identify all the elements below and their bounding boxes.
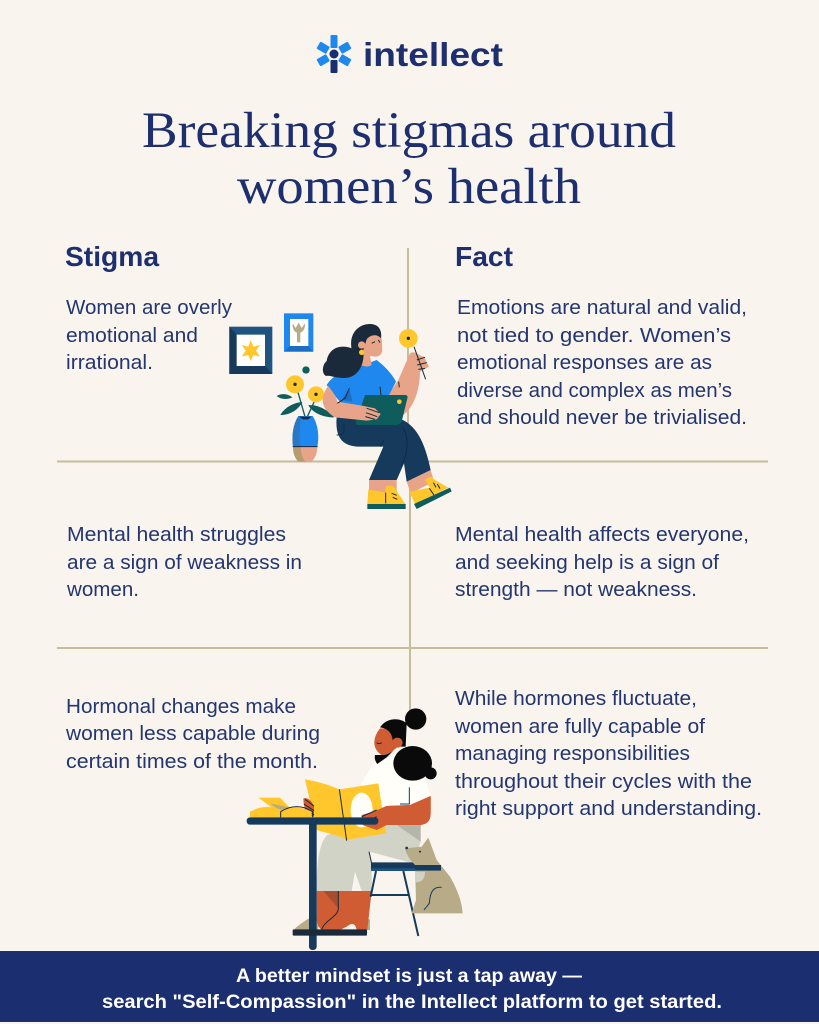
stigma 3 text: Hormonal changes make — [66, 696, 296, 718]
fact 1 text: Emotions are natural and valid, — [457, 297, 747, 319]
title: Breaking stigmas around — [142, 103, 676, 159]
icon: open book and hands — [250, 779, 431, 841]
illustration: woman sitting with tablet and flower — [229, 313, 452, 509]
logo — [316, 35, 503, 73]
stigma 1 text: emotional and — [66, 325, 198, 347]
fact 3 text: women are fully capable of — [454, 716, 705, 738]
figure: woman reading — [295, 708, 437, 930]
fact 1 text: not tied to gender. Women’s — [457, 325, 731, 347]
stigma 3 text: certain times of the month. — [66, 751, 318, 773]
stigma 3 text — [65, 696, 320, 773]
stigma 2 text: women. — [66, 579, 139, 601]
table grid lines — [57, 248, 768, 720]
fact 1 text: and should never be trivialised. — [457, 407, 747, 429]
title — [142, 103, 676, 215]
stigma 2 text: Mental health struggles — [67, 524, 286, 546]
heading: fact: Fact — [455, 241, 513, 272]
desk and chair — [247, 817, 418, 950]
stigma 1 text — [66, 297, 232, 374]
footer banner: search "Self-Compassion" in the Intellect platform to get started. — [102, 991, 722, 1013]
fact 3 text: While hormones fluctuate, — [455, 688, 697, 710]
fact 2 text — [455, 524, 749, 601]
title: women’s health — [237, 159, 581, 215]
logo: intellect — [363, 36, 503, 73]
stigma 3 text: women less capable during — [65, 723, 320, 745]
icon: large framed star — [229, 327, 272, 374]
fact 1 text: diverse and complex as men’s — [457, 380, 732, 402]
heading: stigma: Stigma — [65, 241, 159, 272]
stigma 2 text: are a sign of weakness in — [67, 552, 302, 574]
fact 3 text: managing responsibilities — [455, 743, 690, 765]
fact 3 text: right support and understanding. — [455, 798, 762, 820]
footer banner: A better mindset is just a tap away — — [236, 965, 582, 987]
figure: woman — [323, 324, 452, 509]
icon: vase with flowers — [277, 366, 334, 462]
fact 1 text: emotional responses are as — [457, 352, 712, 374]
fact 2 text: strength — not weakness. — [455, 579, 697, 601]
stigma 1 text: Women are overly — [66, 297, 232, 319]
stigma 2 text — [66, 524, 302, 601]
illustration: woman reading at a desk with dog — [247, 708, 463, 950]
fact 2 text: and seeking help is a sign of — [455, 552, 719, 574]
figure: dog — [405, 838, 463, 913]
footer banner — [0, 951, 819, 1022]
fact 1 text — [457, 297, 747, 429]
fact 2 text: Mental health affects everyone, — [455, 524, 749, 546]
icon: small framed plant — [284, 313, 313, 352]
fact 3 text — [454, 688, 762, 820]
fact 3 text: throughout their cycles with the — [455, 771, 752, 793]
stigma 1 text: irrational. — [66, 352, 153, 374]
